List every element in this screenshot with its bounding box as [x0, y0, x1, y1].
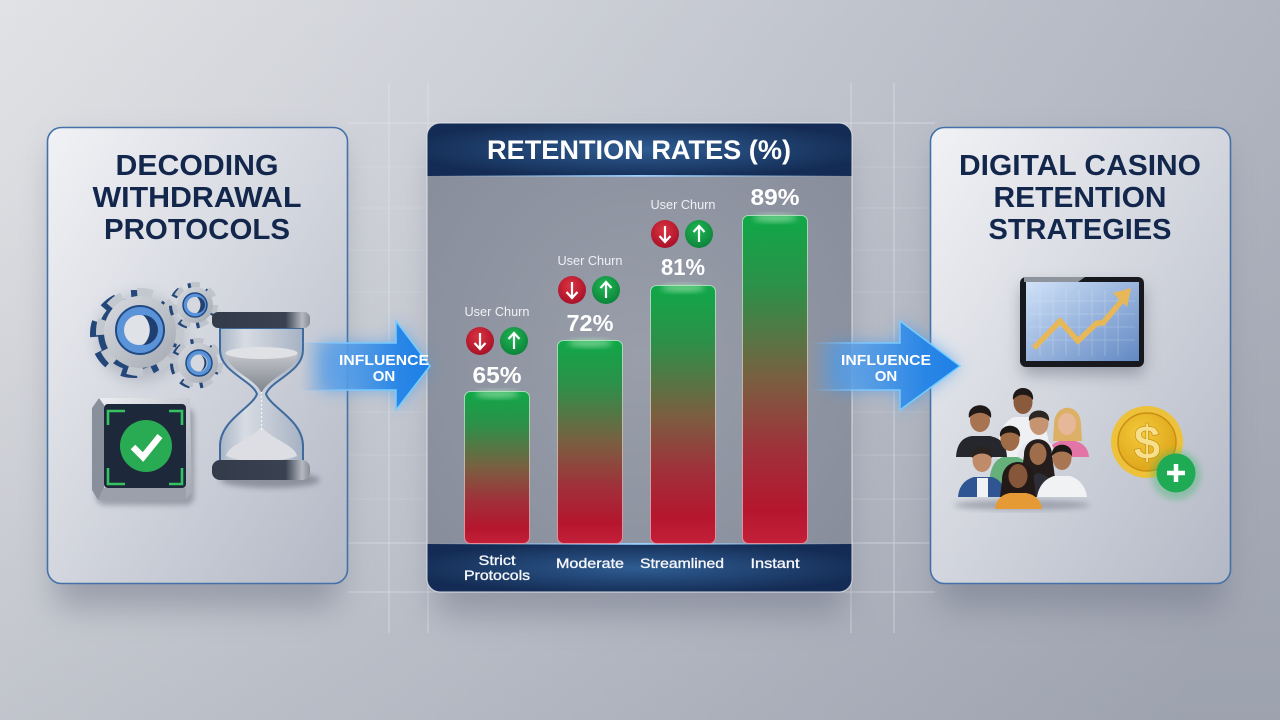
person: orange top woman: [995, 462, 1042, 509]
category labels: Moderate: [556, 555, 624, 571]
arrow: influence on, left to chart: [300, 320, 430, 411]
person: back centre: [998, 388, 1049, 460]
icon: tablet with rising chart: [1020, 277, 1144, 374]
arrow: influence on, left to chart: ON: [373, 368, 395, 385]
right panel heading: RETENTION: [994, 182, 1166, 214]
person: back right woman: [1052, 408, 1089, 457]
right panel heading: DIGITAL CASINO: [959, 150, 1201, 182]
bar: streamlined 81%: 81%: [661, 254, 705, 280]
bar: moderate 72%: [558, 254, 623, 544]
icon: small lower gear: [173, 341, 220, 386]
bar: instant 89%: [742, 184, 808, 544]
category labels: Streamlined: [640, 555, 724, 571]
bar: strict protocols 65%: User Churn: [464, 305, 530, 319]
left panel heading: [92, 150, 302, 246]
arrow: influence on, chart to right: [810, 320, 960, 411]
left panel heading: WITHDRAWAL: [92, 182, 302, 214]
right panel heading: STRATEGIES: [988, 214, 1172, 246]
category labels: Strict: [478, 552, 516, 568]
arrow: influence on, chart to right: ON: [875, 368, 897, 385]
icon: gold dollar coin with plus: $: [1134, 417, 1161, 470]
left panel heading: DECODING: [116, 150, 278, 182]
person: white shirt: [1037, 445, 1087, 497]
icon: gold dollar coin with plus: [1111, 406, 1201, 500]
icon: group of people: [954, 388, 1090, 510]
chart header band: [427, 123, 852, 177]
bar: instant 89%: 89%: [750, 184, 800, 210]
panel: left, decoding withdrawal protocols: [48, 128, 348, 607]
arrow: influence on, left to chart: INFLUENCE: [339, 352, 429, 369]
person: back left: [956, 405, 1007, 457]
person: blue blazer: [958, 447, 1005, 497]
bar: streamlined 81%: User Churn: [650, 198, 716, 212]
person: green shirt: [989, 426, 1032, 484]
icon: large gear: [95, 293, 182, 380]
right panel heading: [959, 150, 1201, 246]
bar: streamlined 81%: [650, 198, 716, 544]
arrow: influence on, chart to right: INFLUENCE: [841, 352, 931, 369]
chart outline: [427, 123, 852, 592]
chart footer band: [427, 543, 852, 592]
person: back middle: [1017, 410, 1056, 465]
bar: moderate 72%: 72%: [566, 310, 614, 336]
bar: strict protocols 65%: 65%: [472, 362, 522, 388]
icon: verified check tile: [92, 398, 194, 505]
category labels: [464, 552, 800, 583]
panel: retention rates chart: [427, 123, 852, 615]
icon: small top gear: [172, 285, 215, 326]
person: dark jacket woman: [1021, 439, 1056, 497]
bar: moderate 72%: User Churn: [558, 254, 623, 268]
category labels: Protocols: [464, 567, 530, 583]
bar: strict protocols 65%: [464, 305, 530, 544]
chart title: RETENTION RATES (%): [487, 135, 791, 165]
icon: hourglass: [212, 312, 320, 488]
panel: right, digital casino retention strategies: [930, 128, 1230, 607]
category labels: Instant: [750, 555, 800, 571]
left panel heading: PROTOCOLS: [104, 214, 290, 246]
